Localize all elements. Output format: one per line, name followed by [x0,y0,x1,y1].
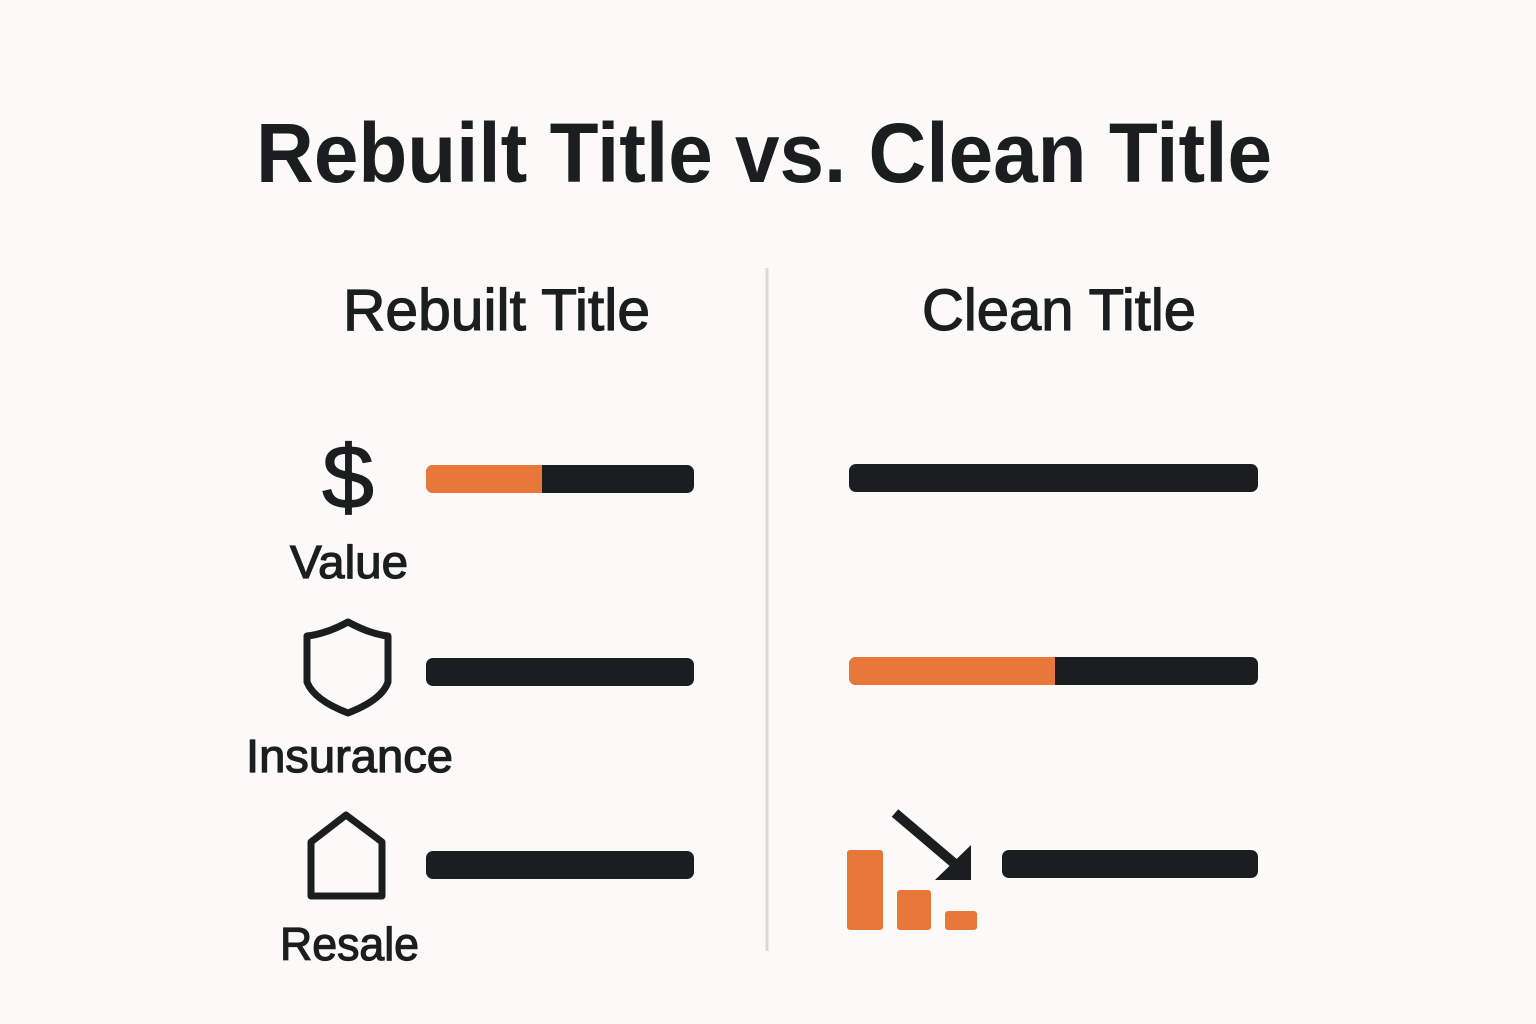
bar: value [849,464,1258,492]
bar: insurance [849,657,1258,685]
panel: rebuilt title [246,278,694,970]
heading: clean title: Clean Title [922,278,1196,343]
panel: clean title [847,278,1258,930]
bar: value [426,465,694,493]
icon: house [311,815,382,896]
label: resale: Resale [280,918,419,970]
label: insurance: Insurance [246,730,453,782]
heading: rebuilt title: Rebuilt Title [343,278,650,343]
bar: insurance [426,658,694,686]
label: value: Value [290,536,408,588]
bar: resale [426,851,694,879]
icon: dollar: $ [322,428,374,528]
bar: resale [1002,850,1258,878]
icon: shield [307,622,388,713]
title: Rebuilt Title vs. Clean Title [256,106,1272,200]
icon: declining bar chart [847,813,977,930]
